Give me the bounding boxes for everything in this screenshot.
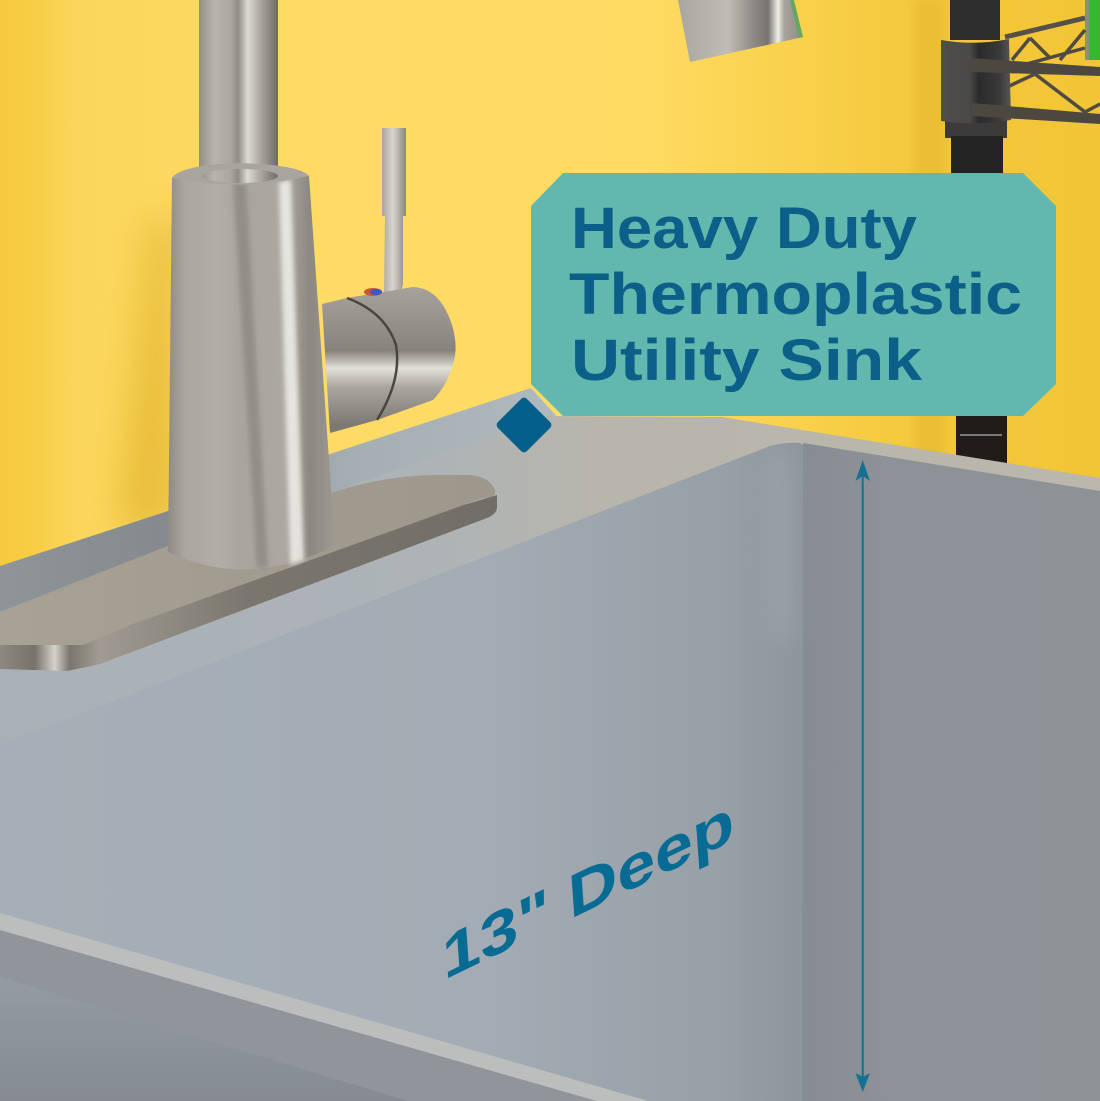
sprayer head xyxy=(678,0,803,62)
basin corner highlight xyxy=(768,448,792,640)
depth label: 13" Deep xyxy=(440,787,736,993)
sink basin left wall xyxy=(0,443,810,1101)
faucet handle lever xyxy=(322,128,456,433)
sink rim top surface xyxy=(0,416,1100,750)
faucet neck xyxy=(199,0,278,184)
depth arrow xyxy=(856,460,870,1092)
callout label: Utility Sink xyxy=(571,328,923,393)
callout label xyxy=(531,173,1056,416)
sink front rim xyxy=(0,913,648,1101)
wire shelf unit xyxy=(941,0,1100,176)
sink basin right wall xyxy=(802,443,1100,1101)
callout label: Thermoplastic xyxy=(569,262,1022,327)
pointer diamond xyxy=(495,396,553,454)
faucet body xyxy=(168,163,335,569)
wall shadow behind faucet xyxy=(118,220,176,530)
faucet deck plate xyxy=(0,475,497,671)
sink back ledge xyxy=(0,388,560,612)
lower shelf post xyxy=(956,410,1007,465)
callout label: Heavy Duty xyxy=(571,196,917,261)
green box on shelf xyxy=(1085,0,1100,60)
yellow wall background xyxy=(0,0,1100,640)
wall shadow behind shelf post xyxy=(914,0,945,470)
